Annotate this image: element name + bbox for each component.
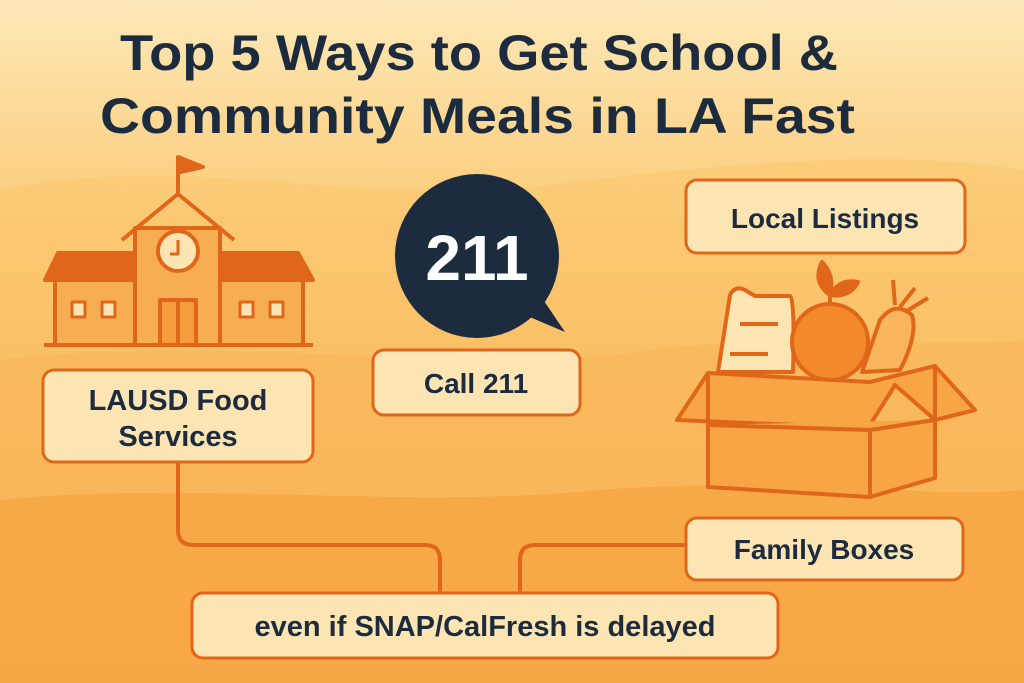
box: Family Boxes: Family Boxes — [734, 534, 914, 565]
box: LAUSD Food Services — [43, 370, 313, 462]
box: LAUSD Food Services: LAUSD Food — [89, 385, 267, 417]
box: Call 211 — [373, 350, 580, 415]
icon: food box — [677, 262, 975, 497]
box: Family Boxes — [686, 518, 963, 580]
box: Local Listings — [686, 180, 965, 253]
connector lines — [178, 462, 686, 594]
box: Local Listings: Local Listings — [731, 203, 919, 234]
title: Top 5 Ways to Get School & — [120, 25, 838, 81]
box: even if SNAP/CalFresh is delayed: even if SNAP/CalFresh is delayed — [255, 611, 715, 643]
icon: 211 speech bubble — [395, 174, 565, 338]
icon: 211 speech bubble: 211 — [425, 222, 529, 294]
box: Call 211: Call 211 — [424, 368, 528, 399]
icon: school — [44, 157, 313, 345]
box: LAUSD Food Services: Services — [118, 421, 238, 453]
title — [100, 25, 855, 144]
title: Community Meals in LA Fast — [100, 88, 855, 144]
box: even if SNAP/CalFresh is delayed — [192, 593, 778, 658]
